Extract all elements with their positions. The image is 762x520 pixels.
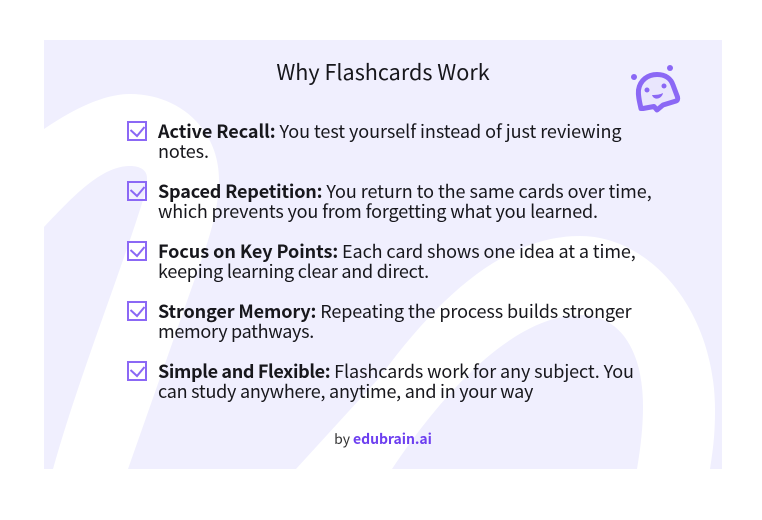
item: Active Recall — [127, 118, 622, 164]
text: line two: notes. — [158, 138, 209, 164]
title: Why Flashcards Work — [276, 56, 490, 87]
text: line one: Stronger Memory: Repeating the process builds stronger — [158, 298, 632, 324]
item: Simple and Flexible — [127, 358, 634, 404]
icon: chat bot mascot — [631, 65, 680, 112]
attribution: by edubrain.ai — [334, 429, 432, 449]
icon: checkbox — [127, 241, 147, 261]
item: Spaced Repetition — [127, 178, 652, 224]
item: Focus on Key Points — [127, 238, 636, 284]
text: line two: which prevents you from forgetting what you learned. — [158, 198, 598, 224]
icon: checkbox — [127, 121, 147, 141]
icon: checkbox — [127, 181, 147, 201]
icon: checkbox — [127, 301, 147, 321]
text: line two: can study anywhere, anytime, and in your way — [158, 378, 533, 404]
icon: checkbox — [127, 361, 147, 381]
text: line one: Simple and Flexible: Flashcards work for any subject. You — [158, 358, 634, 384]
item: Stronger Memory — [127, 298, 632, 344]
text: line one: Active Recall: You test yourself instead of just reviewing — [158, 118, 622, 144]
text: line one: Spaced Repetition: You return to the same cards over time, — [158, 178, 652, 204]
text: line one: Focus on Key Points: Each card shows one idea at a time, — [158, 238, 636, 264]
text: line two: keeping learning clear and direct. — [158, 258, 429, 284]
text: line two: memory pathways. — [158, 318, 314, 344]
